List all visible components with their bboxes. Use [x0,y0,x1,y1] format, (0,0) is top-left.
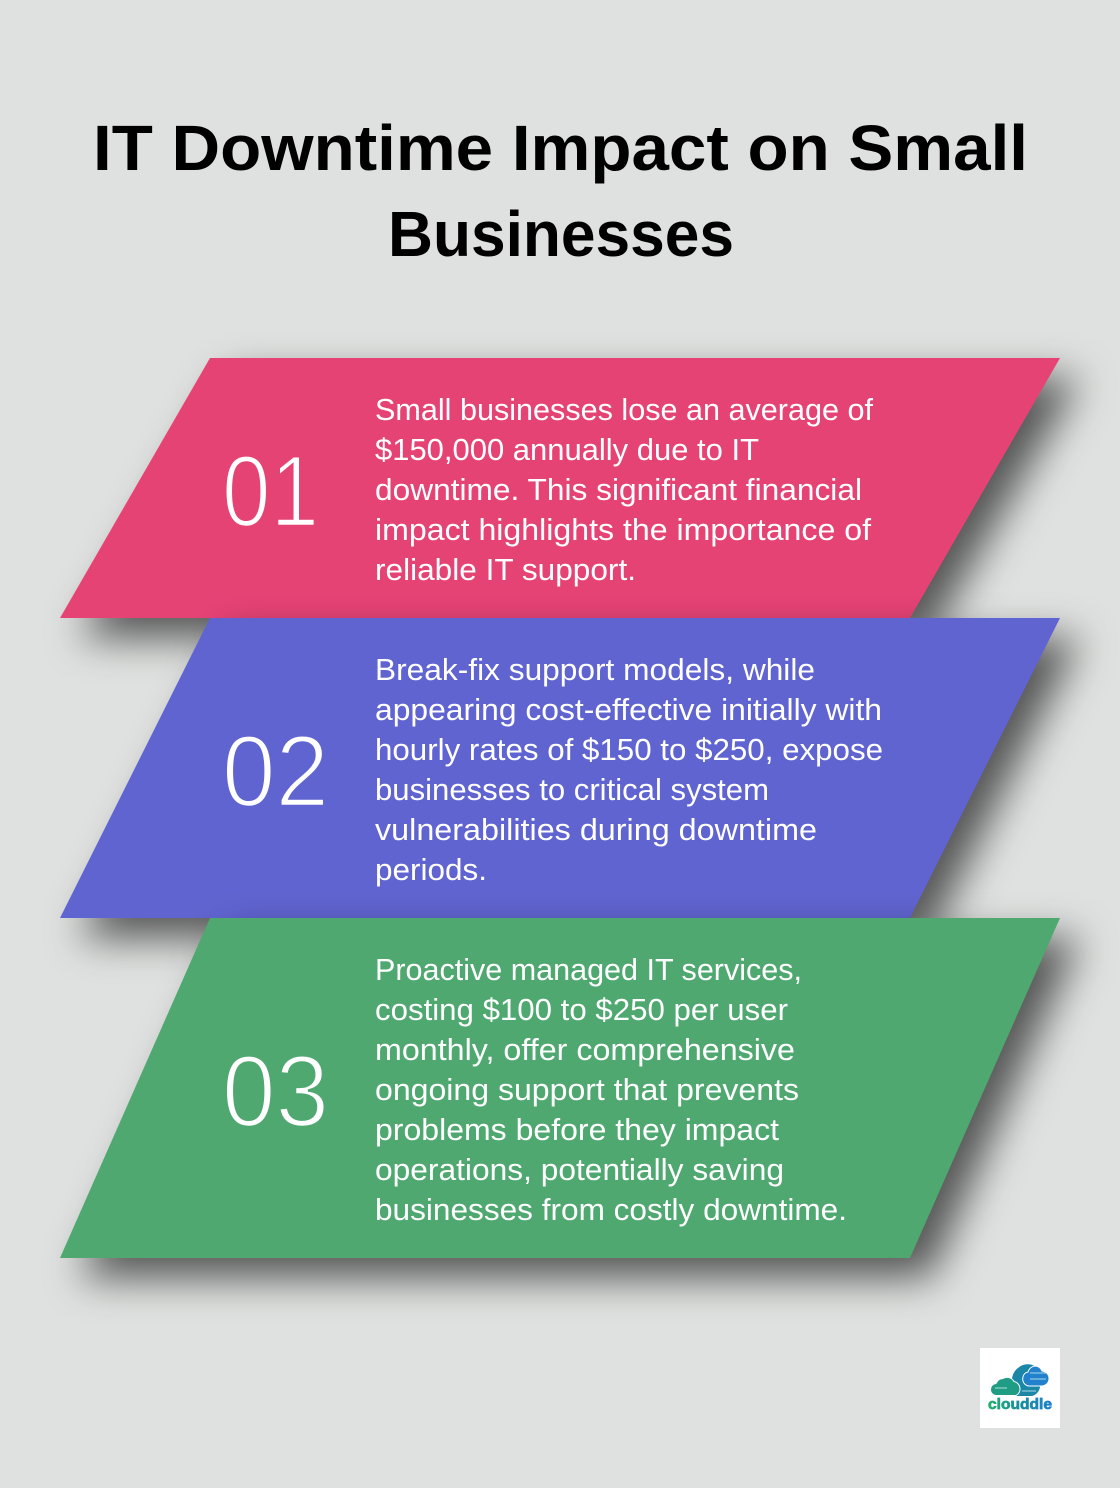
text: panel 03 description [375,953,847,1227]
title [93,112,1028,270]
text: panel 03 description: operations, potentially saving [375,1153,784,1187]
text: panel 02 description: periods. [375,853,487,887]
text: panel 02 description: Break-fix support models, while [375,653,815,687]
text: panel 03 description: Proactive managed IT services, [375,953,802,987]
panel 01: annual downtime losses [60,358,1080,638]
text: panel 01 description: reliable IT support. [375,553,636,587]
panel 03: managed IT services [60,918,1080,1278]
text: panel 03 description: ongoing support that prevents [375,1073,799,1107]
text: panel 03 description: businesses from costly downtime. [375,1193,847,1227]
number 02: 02 [222,716,329,828]
text: panel 03 description: monthly, offer comprehensive [375,1033,795,1067]
text: panel 02 description: appearing cost-effective initially with [375,693,882,727]
text: panel 03 description: problems before they impact [375,1113,780,1147]
text: panel 01 description: $150,000 annually due to IT [375,433,759,467]
number 01: 01 [222,436,319,548]
panel 02: break-fix support [60,618,1080,938]
title: IT Downtime Impact on Small [93,112,1028,184]
text: panel 01 description: downtime. This significant financial [375,473,862,507]
text: panel 03 description: costing $100 to $250 per user [375,993,788,1027]
number 03: 03 [222,1036,329,1148]
title: Businesses [388,198,734,270]
text: panel 01 description: Small businesses lose an average of [375,393,874,427]
icon: clouds [990,1364,1049,1396]
text: panel 02 description: hourly rates of $150 to $250, expose [375,733,883,767]
logo: clouddle [980,1348,1060,1428]
logo wordmark: clouddle [988,1396,1052,1413]
text: panel 01 description: impact highlights the importance of [375,513,872,547]
text: panel 02 description [375,653,883,887]
text: panel 01 description [375,393,874,587]
text: panel 02 description: businesses to critical system [375,773,769,807]
text: panel 02 description: vulnerabilities during downtime [375,813,817,847]
